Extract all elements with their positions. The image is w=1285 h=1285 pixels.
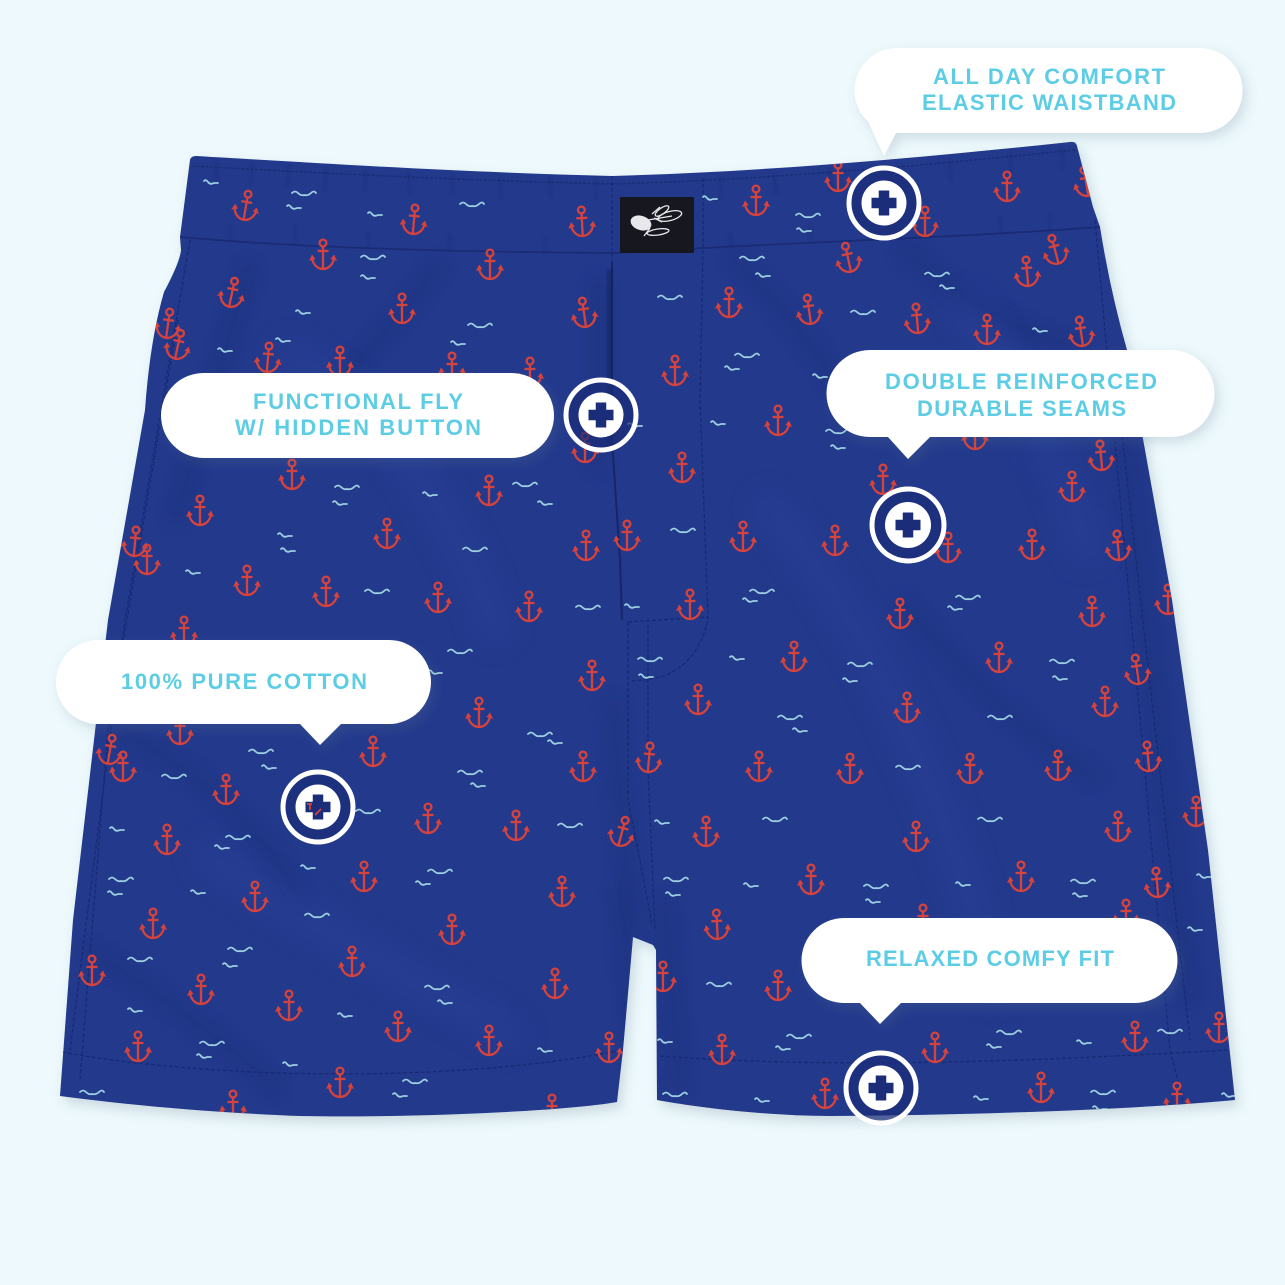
callout text: DOUBLE REINFORCED — [885, 369, 1157, 394]
callout: cotton — [56, 640, 431, 745]
callout: waistband — [855, 48, 1242, 156]
callout: seams — [826, 350, 1214, 459]
hotspot: seams — [872, 489, 944, 561]
anchor pattern — [78, 162, 1233, 1124]
woven logo label — [620, 197, 694, 253]
boxer shorts — [60, 142, 1236, 1124]
callout text: RELAXED COMFY FIT — [866, 946, 1115, 971]
callout text: W/ HIDDEN BUTTON — [235, 415, 481, 440]
callout text: 100% PURE COTTON — [121, 669, 367, 694]
fabric folds — [606, 176, 633, 1014]
hotspot: fly — [566, 380, 636, 450]
callout text: ALL DAY COMFORT — [933, 64, 1166, 89]
callout text: FUNCTIONAL FLY — [253, 389, 463, 414]
shorts drop shadow — [64, 148, 1239, 1122]
callout: fit — [802, 918, 1178, 1024]
callout text — [885, 369, 1157, 421]
fly and seams stitching — [62, 178, 1228, 1100]
callout text — [235, 389, 481, 440]
hotspot: waistband — [849, 168, 919, 238]
wave pattern — [80, 180, 1236, 1110]
hotspot: cotton — [283, 772, 353, 842]
hotspot: fit — [846, 1053, 916, 1123]
callout text: DURABLE SEAMS — [917, 396, 1126, 421]
waistband — [180, 147, 1100, 254]
callout text — [922, 64, 1176, 115]
callout: fly — [161, 373, 554, 458]
callout text: ELASTIC WAISTBAND — [922, 90, 1176, 115]
